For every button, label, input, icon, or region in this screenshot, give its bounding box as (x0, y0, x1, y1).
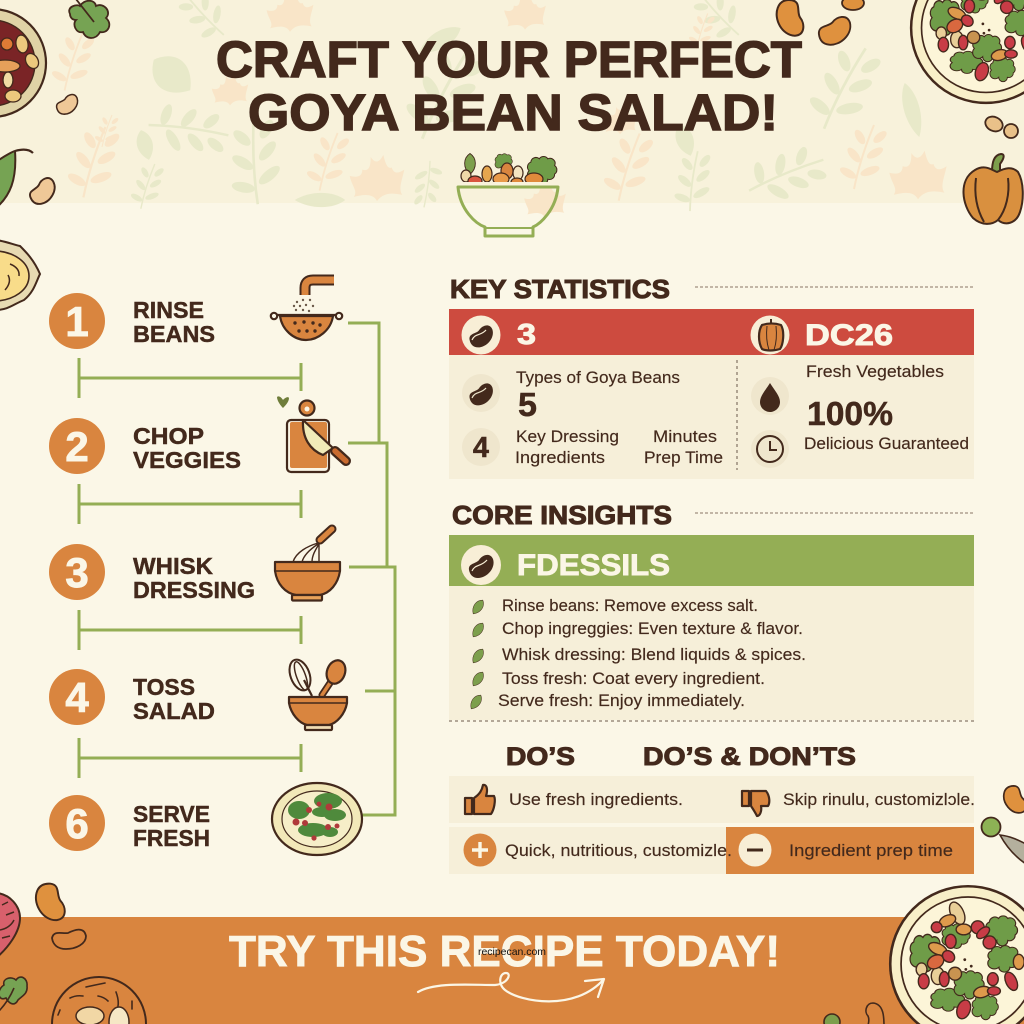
step 4: toss salad (49, 669, 215, 725)
connectors between steps (79, 358, 301, 778)
decorative bean and knife: right (982, 784, 1024, 864)
step 3: whisk dressing: 3 (65, 549, 89, 596)
stat: fresh vegetables (751, 362, 944, 415)
step 2: chop veggies: CHOP (133, 423, 204, 449)
step 3: whisk dressing: WHISK (133, 553, 213, 579)
panel: core insights: FDESSILS (517, 549, 670, 582)
stat: key dressing ingredients: Key Dressing (516, 427, 619, 446)
step 1: rinse beans: BEANS (133, 321, 215, 347)
panel: dos and donts: Use fresh ingredients. (509, 790, 683, 809)
icon: salad bowl (456, 154, 561, 236)
step 1: rinse beans: RINSE (133, 297, 204, 323)
banner: call to action (0, 917, 1024, 1024)
icon: bowl and whisk (275, 529, 340, 600)
icon: faucet and colander (271, 280, 342, 340)
icon: cutting board and knife (277, 396, 346, 472)
header background with faint leaf pattern (0, 0, 1024, 223)
panel: key statistics: DC26 (805, 319, 893, 352)
panel: dos and donts (449, 776, 975, 874)
insight list: Toss fresh: Coat every ingredient. (502, 669, 765, 688)
icon: thumbs up (465, 785, 495, 814)
panel: dos and donts: Quick, nutritious, customizle. (505, 841, 732, 860)
bracket flow lines (348, 323, 395, 815)
icon: pepper decoration (963, 154, 1023, 224)
step 3: whisk dressing: DRESSING (133, 577, 255, 603)
icon: bean badge green (461, 545, 501, 585)
clover (69, 0, 109, 38)
stat: fresh vegetables: Fresh Vegetables (806, 362, 944, 381)
watermark: recipecan.com (478, 946, 546, 958)
step 2: chop veggies: 2 (65, 423, 89, 470)
title: CRAFT YOUR PERFECT (216, 31, 802, 88)
icon: bean badge (462, 316, 500, 354)
step 4: toss salad: SALAD (133, 698, 215, 724)
heading: dos and donts: DO’S & DON’TS (643, 743, 856, 771)
icon: minus badge (738, 834, 772, 866)
insight list: Rinse beans: Remove excess salt. (502, 596, 758, 615)
panel: key statistics (449, 309, 974, 479)
panel: dos and donts: Ingredient prep time (789, 841, 953, 860)
heading: core insights: CORE INSIGHTS (452, 500, 672, 530)
clover bottom (0, 977, 27, 1012)
stat: minutes prep time (644, 427, 723, 467)
step 6: serve fresh: 6 (65, 800, 89, 847)
stat: delicious guaranteed: 100% (807, 395, 893, 432)
panel: steps (49, 293, 255, 851)
insight list: Whisk dressing: Blend liquids & spices. (502, 645, 806, 664)
stat: types of goya beans: Types of Goya Beans (516, 368, 680, 387)
icon: salad bowl with whisk and spoon (286, 657, 349, 730)
decorative food corners: top (0, 0, 1024, 138)
insight list (468, 596, 806, 711)
panel: core insights (449, 535, 974, 720)
stat: types of goya beans: 5 (518, 386, 537, 423)
heading: dos and donts (506, 743, 856, 771)
stat: key dressing ingredients: 4 (473, 432, 489, 464)
stat: delicious guaranteed: Delicious Guaranteed (804, 434, 969, 453)
stat: key dressing ingredients: Ingredients (515, 448, 605, 467)
icon: thumbs down (742, 791, 769, 816)
heading: key statistics: KEY STATISTICS (450, 274, 670, 304)
step 6: serve fresh: FRESH (133, 825, 210, 851)
arrow (418, 973, 604, 1001)
heading: dos and donts: DO’S (506, 743, 575, 771)
insight list: Chop ingreggies: Even texture & flavor. (502, 619, 803, 638)
banner: call to action: TRY THIS RECIPE TODAY! (229, 927, 780, 976)
step 6: serve fresh (49, 795, 210, 851)
step 2: chop veggies: VEGGIES (133, 447, 241, 473)
step 4: toss salad: TOSS (133, 674, 195, 700)
stat: key dressing ingredients (462, 427, 619, 467)
dish outline (52, 977, 146, 1024)
decorative pod, bean and dish: left (0, 150, 57, 310)
stat: minutes prep time: Prep Time (644, 448, 723, 467)
panel: key statistics: 3 (517, 319, 536, 351)
step 2: chop veggies (49, 418, 241, 474)
step 1: rinse beans (49, 293, 215, 349)
stat: types of goya beans (462, 368, 680, 423)
panel: dos and donts: Skip rinulu, customizlɔle. (783, 790, 975, 809)
icon: pepper badge (750, 316, 790, 354)
title (216, 31, 802, 141)
stat: minutes prep time: Minutes (653, 427, 717, 446)
step 4: toss salad: 4 (65, 674, 89, 721)
stat: delicious guaranteed (751, 395, 969, 468)
step 1: rinse beans: 1 (65, 298, 89, 345)
title: GOYA BEAN SALAD! (248, 84, 778, 141)
icon: plus badge (464, 834, 496, 866)
icon: salad plate (272, 783, 362, 855)
step 3: whisk dressing (49, 544, 255, 603)
step 6: serve fresh: SERVE (133, 801, 210, 827)
insight list: Serve fresh: Enjoy immediately. (498, 691, 745, 710)
decorative food corners: bottom (0, 881, 1024, 1024)
